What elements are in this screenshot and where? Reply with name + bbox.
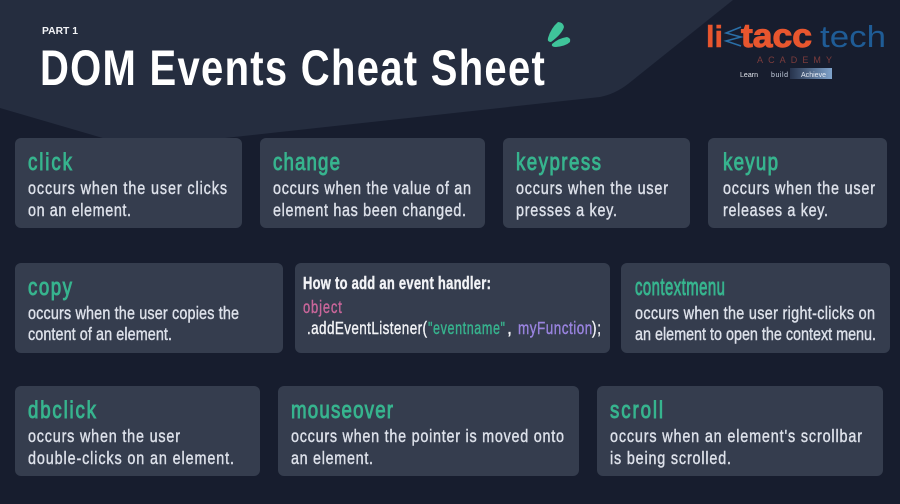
panel: keypress: occurs when the user bbox=[516, 179, 669, 198]
heading: part label: PART 1 bbox=[42, 25, 78, 37]
panel: change: occurs when the value of an bbox=[273, 179, 471, 198]
panel: keypress: presses a key. bbox=[516, 201, 617, 220]
panel: contextmenu: contextmenu bbox=[635, 275, 725, 301]
panel: keyup: releases a key. bbox=[723, 201, 828, 220]
panel: contextmenu: occurs when the user right-clicks on bbox=[635, 304, 875, 323]
panel: copy: content of an element. bbox=[28, 325, 172, 344]
panel: how to add an event handler: How to add an event handler: bbox=[303, 274, 491, 294]
logo: listacc tech academy: tacc bbox=[741, 17, 812, 54]
panel: keyup bbox=[708, 138, 887, 228]
panel: mouseover bbox=[278, 386, 579, 476]
header background shape bbox=[0, 0, 733, 148]
logo: listacc tech academy bbox=[706, 17, 886, 79]
panel: mouseover: an element. bbox=[291, 449, 373, 468]
panel: dbclick: dbclick bbox=[28, 397, 96, 424]
panel: dbclick: double-clicks on an element. bbox=[28, 449, 234, 468]
panel: scroll: occurs when an element's scrollbar bbox=[610, 427, 863, 446]
panel: mouseover: mouseover bbox=[291, 397, 393, 424]
panel: scroll: is being scrolled. bbox=[610, 449, 731, 468]
panel: contextmenu bbox=[621, 263, 890, 353]
icon: green accent marks bbox=[548, 22, 570, 47]
panel: click bbox=[15, 138, 242, 228]
panel: scroll: scroll bbox=[610, 397, 663, 424]
title: DOM Events Cheat Sheet bbox=[40, 40, 545, 96]
panel: how to add an event handler: .addEventListener( bbox=[307, 319, 428, 339]
panel: keypress: keypress bbox=[516, 149, 601, 176]
panel: copy: occurs when the user copies the bbox=[28, 304, 239, 323]
panel: click: on an element. bbox=[28, 201, 131, 220]
panel: how to add an event handler: object bbox=[303, 298, 342, 318]
panel: click: click bbox=[28, 149, 72, 176]
panel: change: element has been changed. bbox=[273, 201, 466, 220]
panel: how to add an event handler: "eventname" bbox=[428, 319, 505, 339]
panel: contextmenu: an element to open the context menu. bbox=[635, 325, 876, 344]
panel: how to add an event handler: ); bbox=[592, 319, 601, 339]
panel: keyup: occurs when the user bbox=[723, 179, 876, 198]
panel: change: change bbox=[273, 149, 340, 176]
panel: keyup: keyup bbox=[723, 149, 778, 176]
logo: listacc tech academy: Learn bbox=[740, 72, 758, 79]
panel: click: occurs when the user clicks bbox=[28, 179, 227, 198]
panel: how to add an event handler: , bbox=[507, 318, 512, 338]
logo: listacc tech academy: ACADEMY bbox=[757, 55, 832, 65]
panel: copy: copy bbox=[28, 274, 72, 301]
logo: listacc tech academy: build bbox=[771, 72, 788, 79]
panel: dbclick: occurs when the user bbox=[28, 427, 181, 446]
panel: mouseover: occurs when the pointer is moved onto bbox=[291, 427, 564, 446]
panel: scroll bbox=[597, 386, 883, 476]
logo: listacc tech academy: tech bbox=[820, 19, 886, 54]
logo: listacc tech academy: li bbox=[706, 19, 723, 54]
panel: copy bbox=[15, 263, 283, 353]
panel: dbclick bbox=[15, 386, 260, 476]
panel: how to add an event handler bbox=[295, 263, 610, 353]
panel: how to add an event handler: myFunction bbox=[518, 319, 592, 339]
panel: keypress bbox=[503, 138, 690, 228]
logo: listacc tech academy: Achieve bbox=[801, 72, 826, 79]
panel: change bbox=[260, 138, 485, 228]
